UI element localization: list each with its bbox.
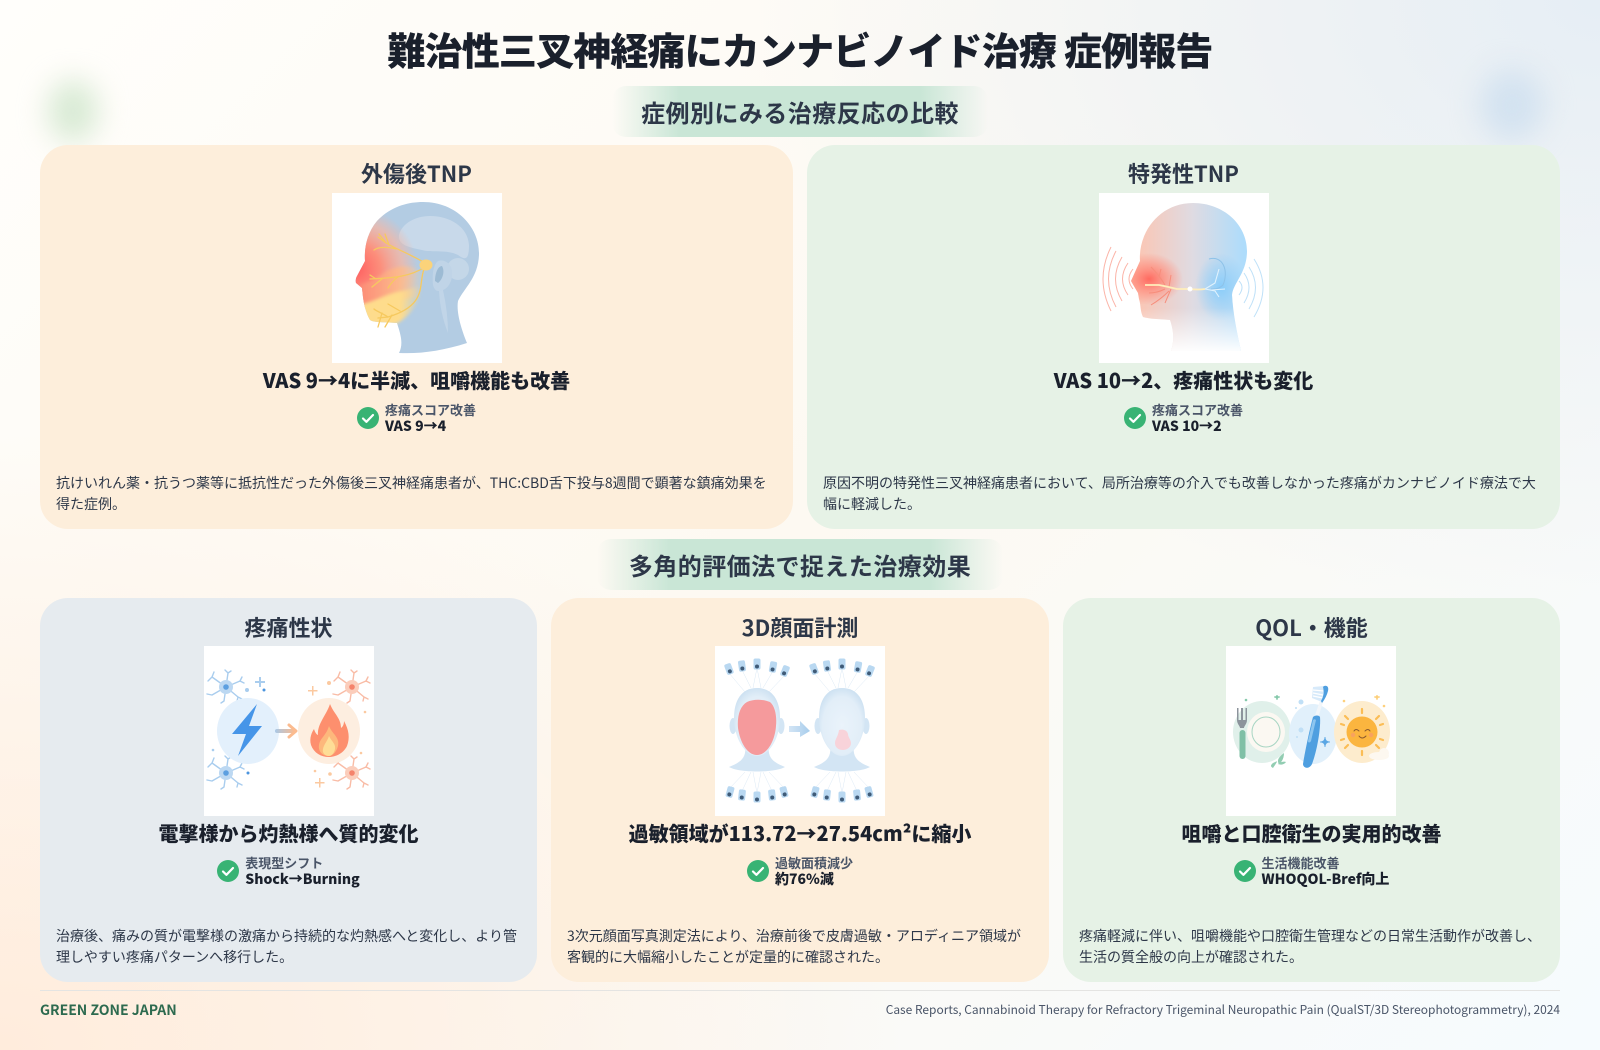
title: 難治性三叉神経痛にカンナビノイド治療 症例報告: [387, 21, 1213, 76]
section heading: case comparison: [612, 86, 988, 137]
panel: pain quality: [40, 598, 537, 982]
badge: hypersensitive area: [747, 853, 853, 889]
badge: hypersensitive area: 過敏面積減少: [775, 853, 853, 872]
badge: pain score: [1124, 400, 1243, 436]
badge: daily function: [1234, 853, 1389, 889]
panel heading: 特発性TNP: [1128, 157, 1239, 189]
badge: pain score: 疼痛スコア改善: [385, 400, 476, 419]
badge: pain score: [357, 400, 476, 436]
description: 客観的に大幅縮小したことが定量的に確認された。: [567, 947, 889, 967]
key result: 過敏領域が113.72→27.54cm²に縮小: [629, 818, 971, 847]
panel heading: 3D顔面計測: [742, 611, 858, 643]
description: [823, 473, 1536, 514]
description: [56, 926, 517, 967]
icon: head with pain waves: [1099, 193, 1269, 363]
panel: idiopathic TNP: [807, 145, 1560, 529]
key result: 電撃様から灼熱様へ質的変化: [158, 818, 418, 847]
description: [567, 926, 1021, 967]
description: 得た症例。: [56, 494, 126, 514]
badge: daily function: WHOQOL-Bref向上: [1262, 869, 1389, 889]
badge: phenotype shift: 表現型シフト: [245, 853, 323, 872]
icon: plate, toothbrush and sun: [1226, 646, 1396, 816]
panel: post-traumatic TNP: [40, 145, 793, 529]
description: 治療後、痛みの質が電撃様の激痛から持続的な灼熱感へと変化し、より管: [56, 926, 517, 946]
icon: 3D face scan before and after: [715, 646, 885, 816]
badge: hypersensitive area: 約76%減: [775, 869, 834, 889]
panel: 3D face measurement: [551, 598, 1049, 982]
icon: lightning to flame: [204, 646, 374, 816]
panel heading: 外傷後TNP: [361, 157, 472, 189]
description: 疼痛軽減に伴い、咀嚼機能や口腔衛生管理などの日常生活動作が改善し、: [1079, 926, 1541, 946]
footer: [40, 990, 1560, 1030]
citation: Case Reports, Cannabinoid Therapy for Refractory Trigeminal Neuropathic Pain (QualST/3D Stereophotogrammetry), 2024: [886, 1001, 1560, 1018]
description: 抗けいれん薬・抗うつ薬等に抵抗性だった外傷後三叉神経痛患者が、THC:CBD舌下投与8週間で顕著な鎮痛効果を: [56, 473, 767, 493]
description: 生活の質全般の向上が確認された。: [1079, 947, 1303, 967]
section heading: case comparison: 症例別にみる治療反応の比較: [641, 94, 959, 129]
brand: GREEN ZONE JAPAN: [40, 1000, 177, 1020]
badge: pain score: VAS 9→4: [385, 416, 446, 436]
key result: 咀嚼と口腔衛生の実用的改善: [1182, 818, 1442, 847]
description: 幅に軽減した。: [823, 494, 921, 514]
description: 原因不明の特発性三叉神経痛患者において、局所治療等の介入でも改善しなかった疼痛がカンナビノイド療法で大: [823, 473, 1536, 493]
badge: phenotype shift: Shock→Burning: [245, 869, 360, 889]
panel heading: QOL・機能: [1255, 611, 1368, 643]
section heading: multi-angle evaluation: [597, 539, 1003, 590]
panel heading: 疼痛性状: [244, 611, 332, 643]
badge: pain score: 疼痛スコア改善: [1152, 400, 1243, 419]
badge: phenotype shift: [217, 853, 360, 889]
description: [56, 473, 767, 514]
description: 理しやすい疼痛パターンへ移行した。: [56, 947, 293, 967]
icon: head with trigeminal nerve: [332, 193, 502, 363]
key result: VAS 10→2、疼痛性状も変化: [1054, 365, 1313, 394]
badge: pain score: VAS 10→2: [1152, 416, 1222, 436]
panel: QOL and function: [1063, 598, 1560, 982]
description: [1079, 926, 1541, 967]
key result: VAS 9→4に半減、咀嚼機能も改善: [263, 365, 570, 394]
description: 3次元顔面写真測定法により、治療前後で皮膚過敏・アロディニア領域が: [567, 926, 1021, 946]
section heading: multi-angle evaluation: 多角的評価法で捉えた治療効果: [629, 547, 971, 582]
badge: daily function: 生活機能改善: [1262, 853, 1340, 872]
